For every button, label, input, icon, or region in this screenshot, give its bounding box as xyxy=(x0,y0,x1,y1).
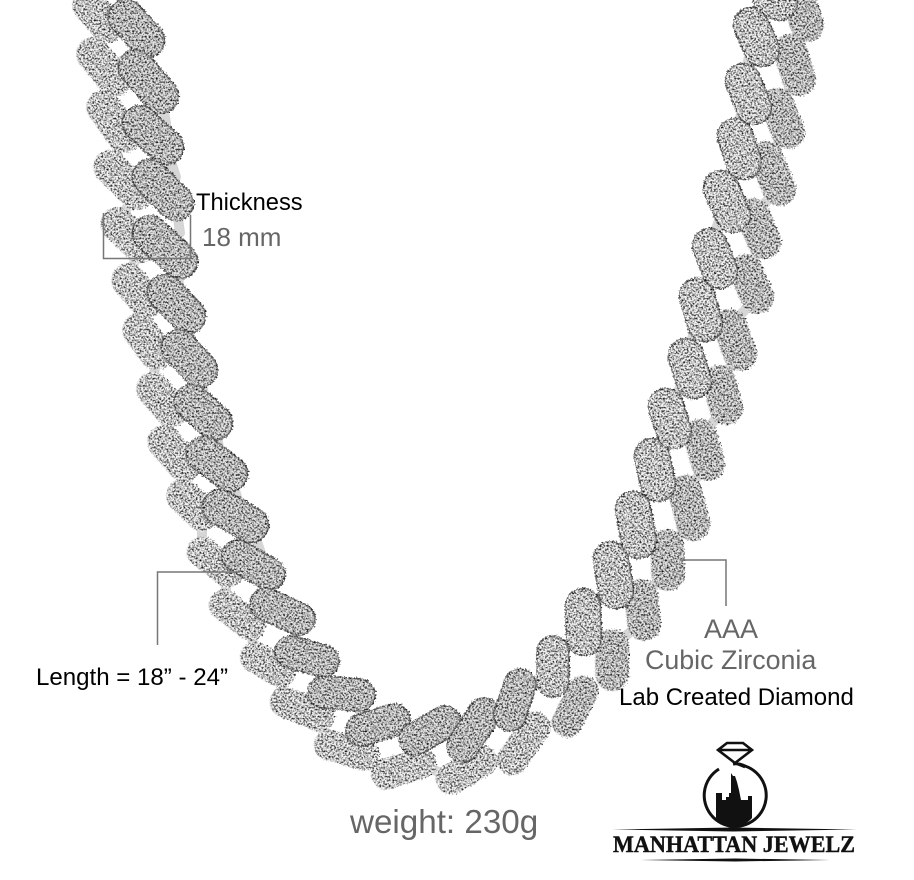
weight label: weight: 230g xyxy=(349,804,538,841)
chain: left strand xyxy=(89,5,262,556)
AAA label: AAA xyxy=(704,614,758,644)
thickness label: Thickness xyxy=(196,190,303,216)
cubic zirconia label: Cubic Zirconia xyxy=(645,645,816,675)
logo bottom rule xyxy=(640,858,830,862)
lab created diamond label: Lab Created Diamond xyxy=(619,684,854,711)
callout: thickness xyxy=(104,190,303,258)
thickness bracket xyxy=(104,213,190,258)
chain: bottom curve xyxy=(202,552,535,779)
thickness value: 18 mm xyxy=(202,222,281,252)
logo top rule xyxy=(612,828,857,832)
logo wordmark: MANHATTAN JEWELZ xyxy=(613,832,855,857)
icon: skyline with statue xyxy=(716,773,752,827)
chain: right strand xyxy=(553,0,807,722)
icon: diamond xyxy=(718,743,752,767)
icon: ring xyxy=(704,764,766,826)
callout: length xyxy=(36,572,240,691)
logo: Manhattan Jewelz xyxy=(612,743,857,862)
callout: stone type xyxy=(619,560,854,711)
stone leader line xyxy=(680,560,726,606)
length label: Length = 18” - 24” xyxy=(36,664,228,691)
length leader line xyxy=(158,572,240,645)
